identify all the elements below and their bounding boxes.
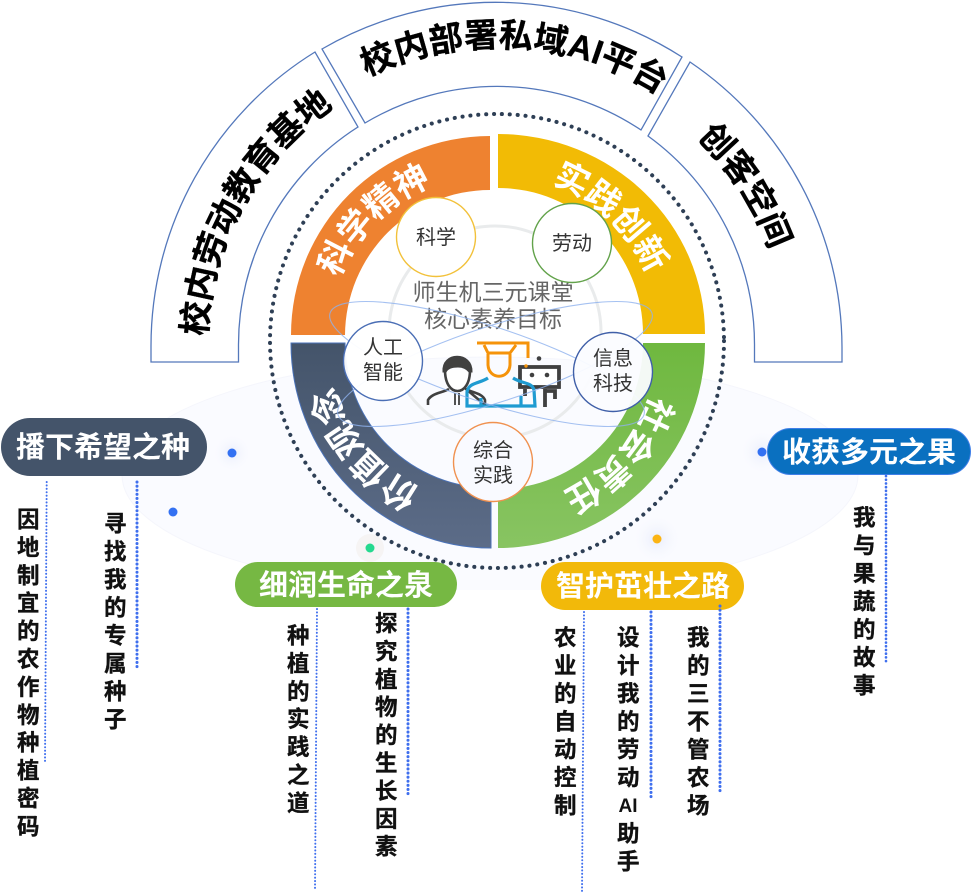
pill: 播下希望之种: 播下希望之种 [16, 431, 190, 464]
vertical label: 因地制宜的农作物种植密码: 因地制宜的农作物种植密码 [17, 508, 40, 839]
center title: 师生机三元课堂 [412, 279, 574, 305]
arch segment: 校内劳动教育基地: 校内劳动教育基地 [178, 89, 332, 336]
circle: 科学: 科学 [416, 226, 456, 249]
segment: 价值观念 [290, 342, 492, 548]
panel: outer arch [150, 2, 843, 363]
dot: blue near first pill [213, 434, 251, 472]
arch segment: 校内部署私域AI平台: 校内部署私域AI平台 [360, 18, 666, 94]
dot: orange [633, 515, 681, 563]
vertical label: 探究植物的生长因素: 探究植物的生长因素 [375, 612, 398, 860]
vertical label: 我与果蔬的故事: 我与果蔬的故事 [853, 506, 876, 698]
vertical label: 我的三不管农场: 我的三不管农场 [687, 626, 710, 818]
pill: 收获多元之果: 收获多元之果 [782, 436, 956, 469]
circle: 信息科技: 信息 [593, 347, 633, 370]
circle: 综合实践: 综合 [473, 439, 513, 462]
segment: 社会责任 [498, 343, 705, 548]
pill: 播下希望之种 [1, 418, 207, 476]
pill: 智护茁壮之路: 智护茁壮之路 [556, 570, 730, 603]
circle: 人工智能: 人工 [363, 336, 403, 359]
arch segment: 创客空间: 创客空间 [700, 124, 795, 248]
circle: 科学 [396, 198, 476, 276]
vertical label: 农业的自动控制: 农业的自动控制 [554, 626, 577, 818]
segment: 价值观念: 价值观念 [311, 387, 418, 512]
pill: 收获多元之果 [768, 428, 970, 474]
icon: teacher, student and robot [428, 343, 559, 407]
inner gray ring [389, 226, 601, 438]
pill: 智护茁壮之路 [541, 562, 744, 610]
circle: 劳动 [532, 204, 612, 282]
arch segment: 校内部署私域AI平台 [321, 2, 683, 131]
circle: 人工智能 [344, 322, 422, 400]
icon: teacher [428, 356, 485, 405]
icon: robot [520, 356, 559, 407]
circle: 综合实践 [454, 422, 532, 502]
vertical label: 种植的实践之道: 种植的实践之道 [287, 624, 310, 816]
segment: 科学精神 [291, 136, 490, 335]
arch segment: 校内劳动教育基地 [150, 51, 359, 363]
segment: 实践创新 [498, 134, 705, 334]
pill: 细润生命之泉 [235, 562, 457, 607]
center title: 核心素养目标 [424, 306, 562, 332]
vertical label: 设计我的劳动AI助手: AI [618, 796, 638, 817]
vertical label: 寻找我的专属种子: 寻找我的专属种子 [104, 512, 127, 732]
orbit lines [318, 277, 664, 451]
panel: core literacy ring [290, 134, 705, 548]
vertical label: 设计我的劳动AI助手 [617, 626, 640, 874]
dot: blue near last pill [740, 430, 784, 474]
circle: 人工智能: 智能 [363, 361, 403, 384]
dotted connector lines [45, 476, 886, 893]
segment: 社会责任: 社会责任 [563, 399, 676, 516]
circle: 信息科技 [574, 332, 652, 412]
arch segment: 创客空间 [647, 61, 843, 363]
segment: 科学精神: 科学精神 [316, 162, 428, 274]
dotted ring [270, 114, 724, 568]
pill: 细润生命之泉: 细润生命之泉 [259, 568, 433, 602]
circle: 信息科技: 科技 [593, 372, 633, 395]
segment: 实践创新: 实践创新 [554, 160, 671, 272]
vertical label: 设计我的劳动AI助手: 助手 [617, 822, 640, 874]
circle: 劳动: 劳动 [552, 232, 592, 255]
dot: green [356, 534, 384, 562]
dot: blue lower left [168, 508, 178, 516]
circle: 综合实践: 实践 [473, 464, 513, 487]
vertical label: 设计我的劳动AI助手: 设计我的劳动 [617, 626, 640, 790]
center title [412, 279, 574, 332]
icon: student with mortarboard [477, 343, 528, 376]
icon: blue shoulders [467, 378, 535, 406]
background soft ellipse [122, 356, 858, 564]
